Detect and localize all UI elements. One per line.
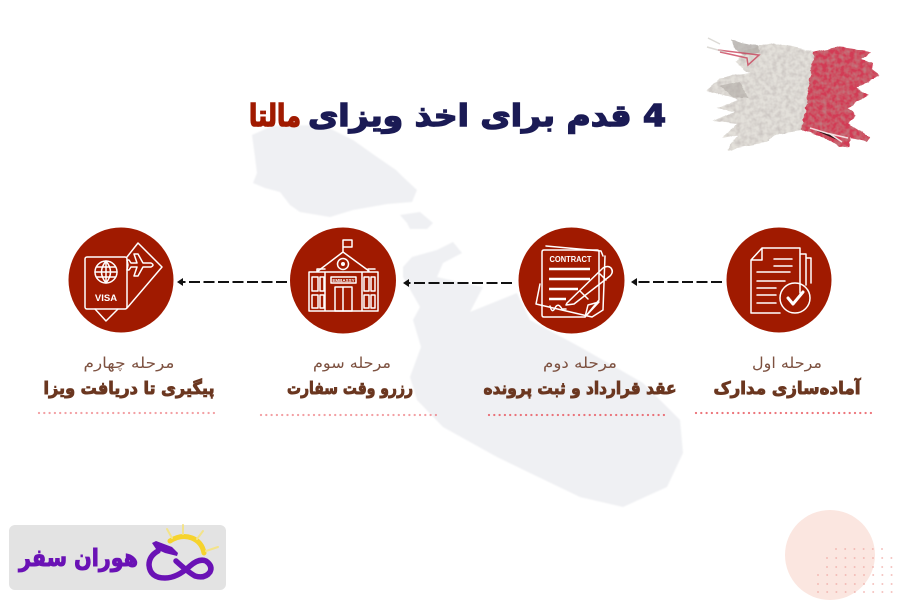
- step 1 label: مرحله اول: [752, 354, 822, 372]
- step 1 heading: آماده‌سازی مدارک: [714, 377, 862, 399]
- step 3 icon: embassy building: [290, 228, 396, 334]
- decorative circle with dots: [785, 510, 900, 600]
- logo sun: [167, 525, 218, 553]
- logo infinity mark: [149, 551, 211, 578]
- step 4 heading: پیگیری تا دریافت ویزا: [44, 378, 214, 399]
- step 2 icon: contract and pen: [518, 228, 624, 334]
- background map of Malta: [252, 125, 683, 507]
- flag of Malta: [707, 38, 880, 150]
- step 3 icon: embassy building: EMBASSY: [332, 278, 355, 283]
- logo airplane mark: [152, 541, 178, 556]
- step 3 heading: رزرو وقت سفارت: [287, 379, 413, 399]
- title: 4 قدم برای اخذ ویزای: [308, 99, 666, 134]
- arrow: step 1 to step 2: [631, 278, 722, 286]
- step 3: embassy appointment: [287, 228, 413, 399]
- step 2 label: مرحله دوم: [543, 354, 617, 372]
- step 4: follow up until visa: [44, 228, 214, 399]
- step 1: prepare documents: [714, 228, 862, 399]
- logo wordmark: هوران سفر: [18, 544, 138, 572]
- arrow: step 2 to step 3: [403, 279, 512, 287]
- step 2 heading: عقد قرارداد و ثبت پرونده: [484, 379, 676, 399]
- arrow: step 3 to step 4: [177, 278, 287, 286]
- step 1 icon: documents with check: [726, 228, 832, 332]
- step 4 icon: visa passport and ticket: [68, 228, 174, 332]
- title: مالتا: [249, 99, 301, 134]
- step 2 icon: contract and pen: CONTRACT: [550, 255, 592, 264]
- step 4 icon: visa passport and ticket: VISA: [95, 293, 117, 304]
- logo: Horan Safar: [9, 525, 226, 590]
- step 3 label: مرحله سوم: [313, 354, 391, 372]
- step 2: contract and file registration: [484, 228, 676, 399]
- step 4 label: مرحله چهارم: [84, 354, 174, 372]
